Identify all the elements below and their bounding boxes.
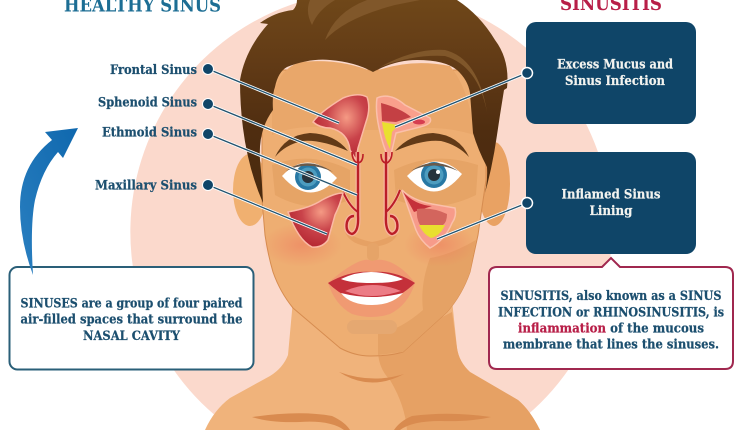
eye socket shading [272,159,478,206]
left frontal sinus [313,95,369,160]
arrow [20,128,78,275]
eye right [407,161,462,192]
label: frontal sinus: Frontal Sinus [110,63,197,78]
right maxillary sinus [402,190,456,248]
philtrum [367,243,379,261]
chin crease and collarbones [252,372,491,430]
callout: sinusitis definition: membrane that lines the sinuses. [503,338,719,353]
hair highlights [308,0,487,112]
cheek flush left [262,223,342,267]
right nasal passage [381,152,400,234]
box: inflamed lining: Inflamed Sinus [562,187,660,202]
left ear [233,154,267,226]
left maxillary sinus [288,193,343,247]
callout: sinuses definition: SINUSES are a group of four paired [20,296,242,311]
callout: sinusitis definition: inflammation of the mucous [518,322,704,337]
box: excess mucus [526,22,696,124]
label: ethmoid sinus: Ethmoid Sinus [102,126,197,140]
cheek flush right [404,223,476,267]
person illustration [205,0,540,430]
box: inflamed lining: Lining [590,204,632,219]
callout: sinusitis definition: SINUSITIS, also known as a SINUS [500,289,722,304]
forehead tone [272,61,474,135]
shoulders and neck [205,300,540,430]
left nasal passage [343,152,363,234]
pointer dot: excess mucus [522,68,532,78]
right ear [478,142,510,226]
box: inflamed lining [526,152,696,254]
leader lines [208,69,527,239]
eye left [282,162,337,193]
box: excess mucus: Sinus Infection [565,74,665,89]
pointer dot: inflamed lining [522,198,532,208]
callout: sinuses definition [10,267,254,370]
neck shadow [378,312,540,430]
hair [240,0,508,203]
eyebrow left [275,133,348,157]
background circle [130,0,612,430]
callout: sinuses definition: air-filled spaces that surround the [20,313,242,328]
eyebrow right [395,133,469,157]
right frontal sinus [376,96,431,160]
label: maxillary sinus: Maxillary Sinus [95,178,197,193]
box: excess mucus: Excess Mucus and [557,58,673,73]
face shading [378,240,476,355]
face [262,70,486,356]
chin shadow [347,320,397,334]
callout: sinusitis definition [489,258,733,369]
mouth [328,260,415,317]
nose tip [345,232,398,247]
callout: sinuses definition: NASAL CAVITY [83,329,181,344]
label: sphenoid sinus: Sphenoid Sinus [98,96,197,110]
